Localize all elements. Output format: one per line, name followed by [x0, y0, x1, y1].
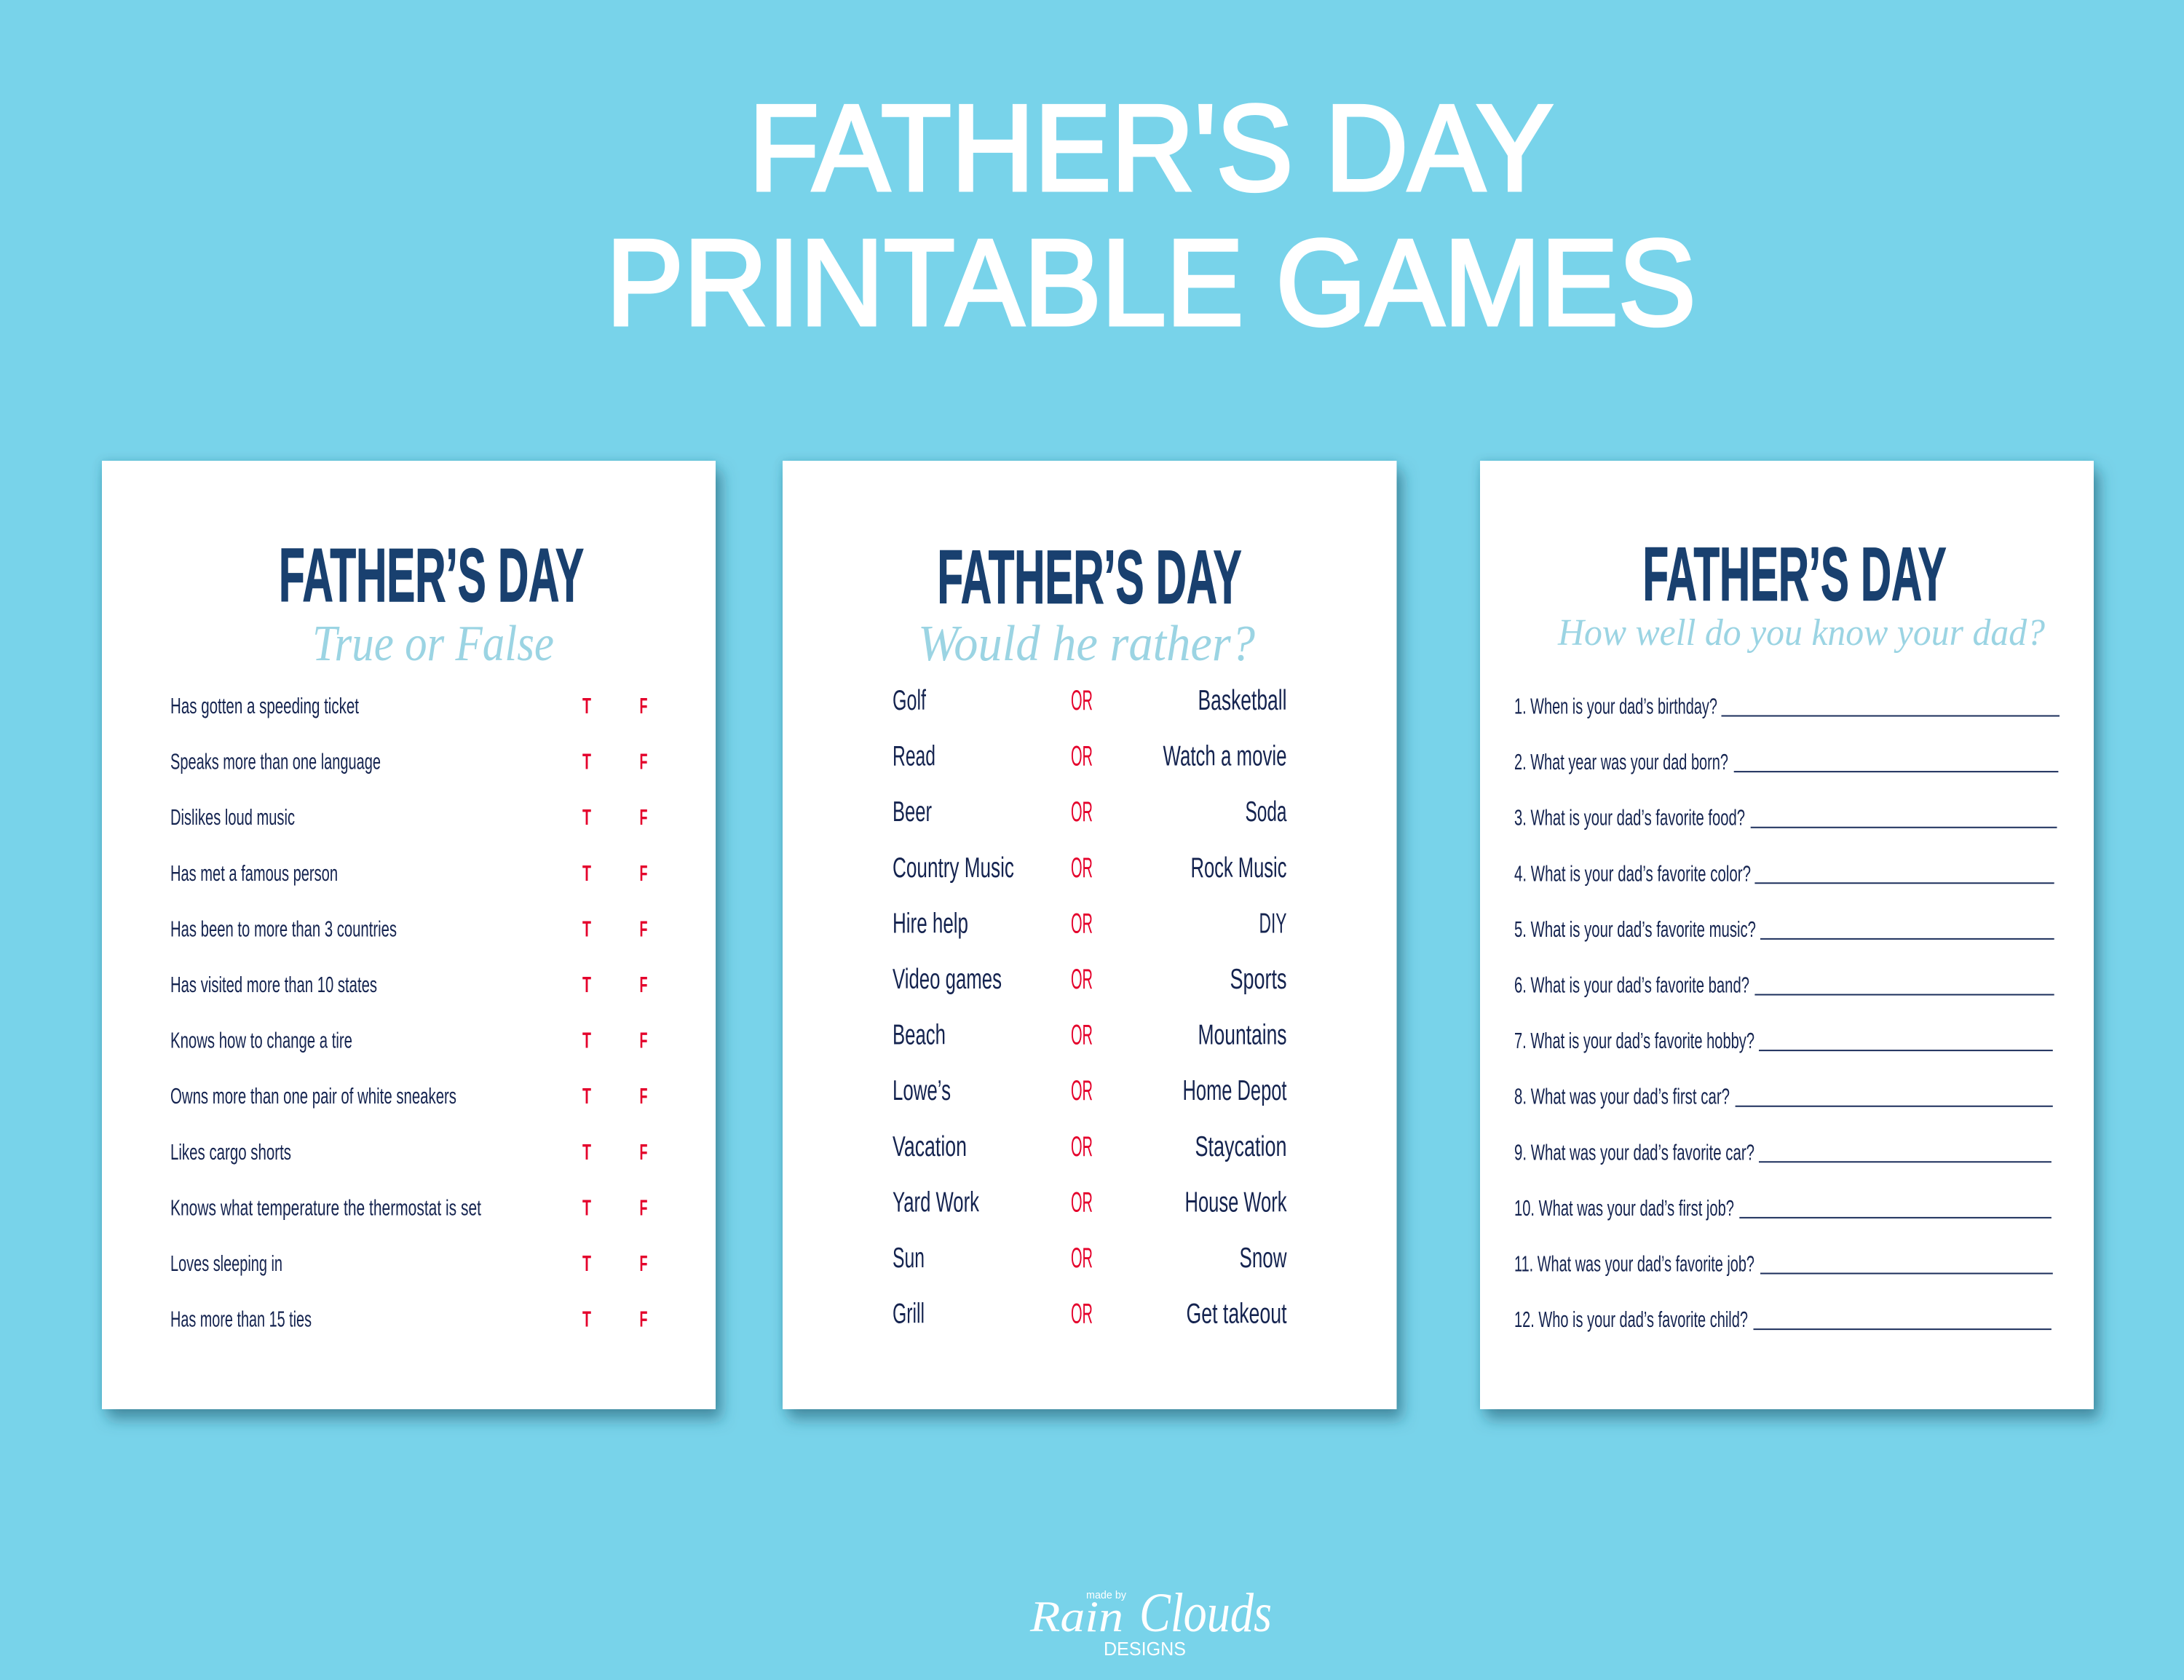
column: OR markers: OR [1071, 796, 1093, 828]
column: F markers: F [639, 805, 648, 830]
list: true or false statements: Loves sleeping in [170, 1251, 282, 1276]
column: F markers: F [639, 1140, 648, 1165]
heading: how well card: FATHER’S DAY [1642, 533, 1947, 617]
list: true or false statements: Has been to more than 3 countries [170, 916, 397, 941]
column: F markers: F [639, 1029, 648, 1053]
column: T markers: T [582, 694, 591, 718]
column: OR markers: OR [1071, 1243, 1093, 1274]
list: true or false statements: Speaks more than one language [170, 750, 381, 774]
column: OR markers: OR [1071, 1186, 1093, 1218]
list: questions: 8. What was your dad’s first car? [1514, 1085, 1730, 1109]
column: F markers: F [639, 1084, 648, 1109]
list: left options: Beer [893, 796, 932, 828]
list: left options: Yard Work [893, 1186, 979, 1218]
list: questions: 2. What year was your dad born? [1514, 750, 1728, 774]
list: right options: Mountains [1198, 1020, 1287, 1051]
column: T markers: T [582, 916, 591, 941]
subtitle: would he rather: Would he rather? [918, 616, 1255, 672]
column: T markers: T [582, 1251, 591, 1276]
list: true or false statements: Knows how to change a tire [170, 1029, 352, 1053]
list: questions [1514, 694, 1756, 1332]
list: questions: 4. What is your dad’s favorite color? [1514, 861, 1751, 886]
title: FATHER'S DAY [748, 79, 1554, 216]
logo: Rain Clouds Designs: Clouds [1139, 1582, 1272, 1644]
column: F markers: F [639, 1251, 648, 1276]
column: OR markers: OR [1071, 852, 1093, 884]
list: right options: Staycation [1195, 1131, 1287, 1162]
column: OR markers: OR [1071, 685, 1093, 716]
list: true or false statements: Has met a famous person [170, 861, 338, 886]
list: left options: Lowe’s [893, 1075, 951, 1106]
column: OR markers: OR [1071, 964, 1093, 995]
column: T markers: T [582, 1140, 591, 1165]
logo: Rain Clouds Designs [1029, 1582, 1272, 1660]
list: right options: DIY [1259, 908, 1287, 939]
list: left options: Grill [893, 1299, 925, 1330]
heading: would he rather card: FATHER’S DAY [938, 536, 1242, 620]
list: questions: 11. What was your dad’s favorite job? [1514, 1252, 1754, 1277]
column: F markers: F [639, 972, 648, 997]
list: right options: Snow [1239, 1243, 1287, 1274]
subtitle: how well do you know your dad: How well do you know your dad? [1557, 612, 2045, 654]
list: left options: Beach [893, 1020, 946, 1051]
list: true or false statements [170, 694, 481, 1332]
list: left options: Hire help [893, 908, 968, 939]
panel: true or false [102, 461, 716, 1409]
heading: true or false card: FATHER’S DAY [279, 534, 584, 618]
list: true or false statements: Dislikes loud music [170, 805, 295, 830]
list: right options: Basketball [1198, 685, 1287, 716]
list: true or false statements: Has visited more than 10 states [170, 972, 377, 997]
column: F markers: F [639, 861, 648, 886]
logo: Rain Clouds Designs: made by [1086, 1589, 1126, 1601]
list: left options: Country Music [893, 852, 1014, 884]
list: questions: 1. When is your dad’s birthday? [1514, 694, 1717, 719]
list: true or false statements: Has gotten a speeding ticket [170, 694, 359, 718]
column: OR markers: OR [1071, 1131, 1093, 1162]
column: T markers: T [582, 1029, 591, 1053]
panel: would he rather [783, 461, 1396, 1409]
column: T markers: T [582, 1195, 591, 1220]
list: right options: Sports [1230, 964, 1287, 995]
column: OR markers: OR [1071, 1020, 1093, 1051]
list: questions: 12. Who is your dad’s favorite child? [1514, 1307, 1748, 1332]
list: true or false statements: Knows what temperature the thermostat is set [170, 1195, 481, 1220]
column: OR markers: OR [1071, 1075, 1093, 1106]
list: right options: Get takeout [1187, 1299, 1287, 1330]
logo: Rain Clouds Designs: Rain [1029, 1593, 1123, 1641]
column: F markers: F [639, 1307, 648, 1332]
column: F markers: F [639, 916, 648, 941]
list: right options: Soda [1245, 796, 1287, 828]
column: F markers: F [639, 750, 648, 774]
list: right options: Home Depot [1182, 1075, 1287, 1106]
list: left options: Video games [893, 964, 1002, 995]
list: questions: 3. What is your dad’s favorite food? [1514, 806, 1745, 831]
list: left options [893, 685, 1014, 1330]
title: PRINTABLE GAMES [606, 214, 1696, 351]
column: OR markers: OR [1071, 908, 1093, 939]
list: true or false statements: Likes cargo shorts [170, 1140, 291, 1165]
column: F markers: F [639, 694, 648, 718]
column: T markers [582, 694, 591, 1332]
title [606, 79, 1696, 351]
panel: how well do you know your dad [1480, 461, 2094, 1409]
column: T markers: T [582, 861, 591, 886]
list: questions: 9. What was your dad’s favorite car? [1514, 1140, 1754, 1165]
column: F markers: F [639, 1195, 648, 1220]
list: true or false statements: Owns more than one pair of white sneakers [170, 1084, 456, 1109]
list: questions: 5. What is your dad’s favorite music? [1514, 917, 1756, 942]
list: right options: Rock Music [1191, 852, 1287, 884]
list: true or false statements: Has more than 15 ties [170, 1307, 312, 1332]
column: OR markers: OR [1071, 1299, 1093, 1330]
column: OR markers [1071, 685, 1093, 1330]
list: left options: Read [893, 741, 935, 772]
subtitle: true or false: True or False [312, 616, 554, 672]
list: questions: 6. What is your dad’s favorite band? [1514, 972, 1749, 997]
column: T markers: T [582, 1307, 591, 1332]
column: OR markers: OR [1071, 741, 1093, 772]
column: T markers: T [582, 805, 591, 830]
list: right options: Watch a movie [1163, 741, 1287, 772]
list: questions: 7. What is your dad’s favorite hobby? [1514, 1029, 1754, 1053]
list: left options: Vacation [893, 1131, 967, 1162]
answer lines [1721, 716, 2060, 1329]
list: right options [1163, 685, 1287, 1330]
list: right options: House Work [1185, 1186, 1287, 1218]
list: left options: Golf [893, 685, 926, 716]
column: T markers: T [582, 1084, 591, 1109]
logo: Rain Clouds Designs: DESIGNS [1104, 1638, 1186, 1660]
column: T markers: T [582, 750, 591, 774]
list: left options: Sun [893, 1243, 925, 1274]
column: T markers: T [582, 972, 591, 997]
column: F markers [639, 694, 648, 1332]
list: questions: 10. What was your dad’s first job? [1514, 1196, 1734, 1221]
